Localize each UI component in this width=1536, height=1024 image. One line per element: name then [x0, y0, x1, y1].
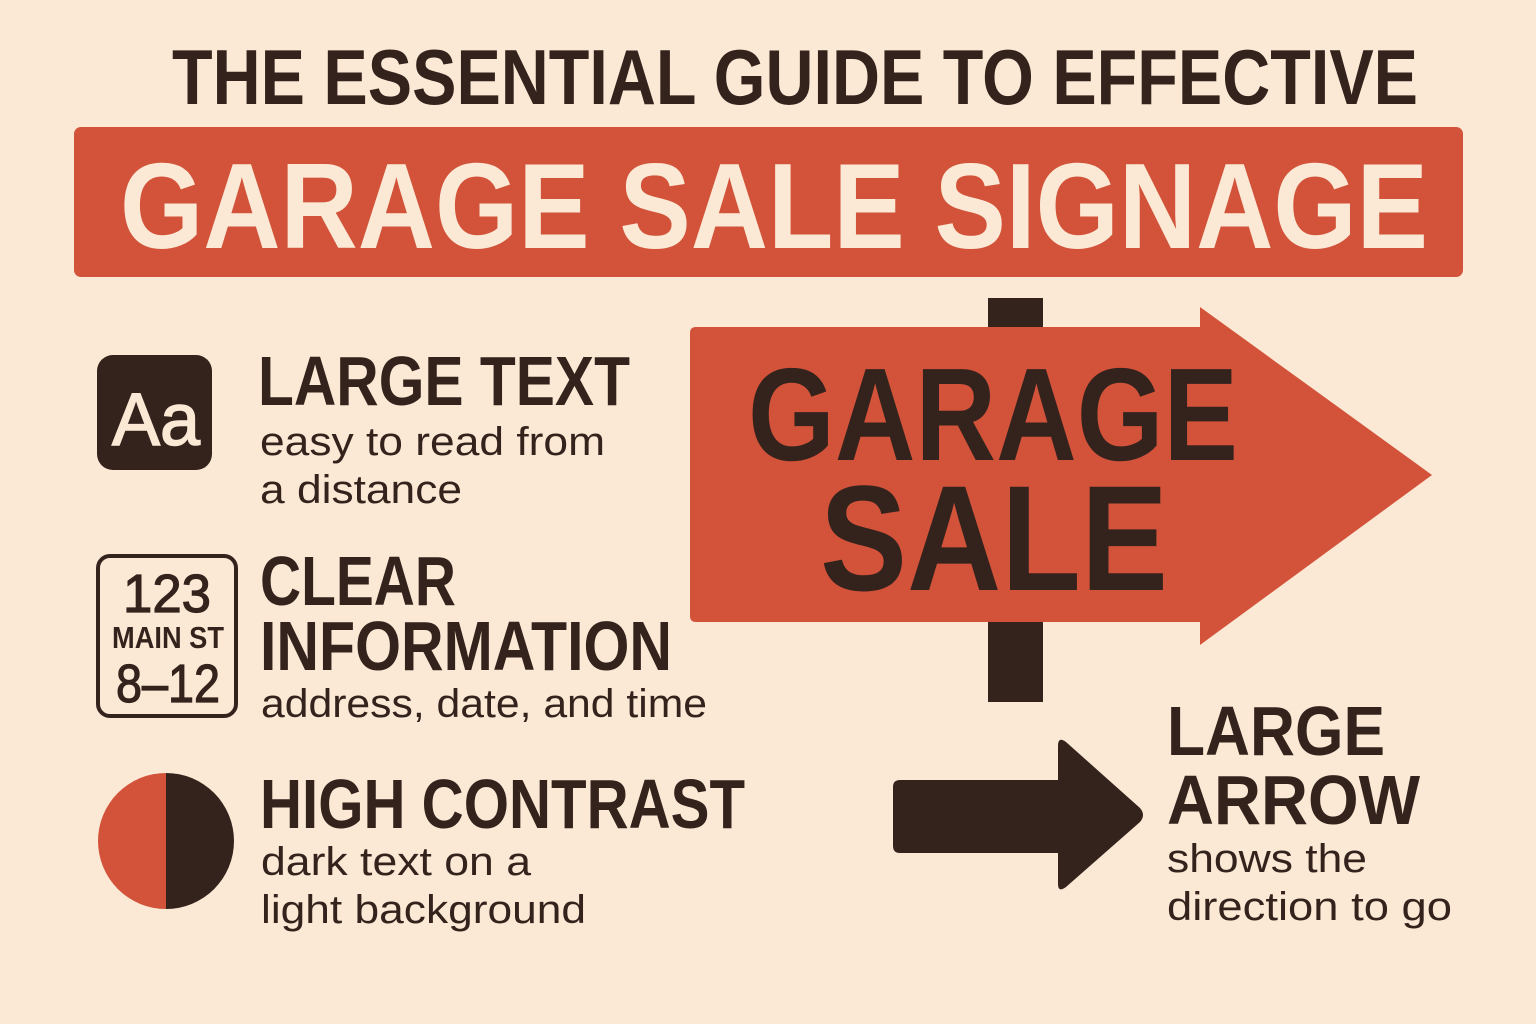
item: large text	[97, 342, 630, 512]
icon: address sign: 8–12	[116, 654, 220, 714]
icon: half circle	[98, 773, 234, 909]
item: large arrow text: shows the	[1167, 837, 1367, 881]
icon: Aa: Aa	[112, 378, 201, 461]
sign: garage sale arrow on post: GARAGE	[748, 341, 1238, 488]
item: large text: LARGE TEXT	[258, 342, 630, 420]
item: large arrow text	[1167, 692, 1452, 929]
sign: garage sale arrow on post	[690, 298, 1432, 702]
item: clear information	[98, 542, 707, 726]
item: large arrow text: LARGE	[1167, 692, 1385, 770]
icon: address sign: MAIN ST	[112, 620, 224, 655]
item: clear information: CLEAR	[260, 542, 456, 620]
item: large text: easy to read from	[260, 420, 605, 464]
item: high contrast	[98, 765, 745, 932]
icon: large arrow	[893, 740, 1143, 889]
item: high contrast: HIGH CONTRAST	[260, 765, 745, 843]
icon: address sign	[98, 556, 236, 716]
item: clear information: address, date, and time	[261, 682, 707, 726]
item: large arrow text: direction to go	[1167, 885, 1452, 929]
item: high contrast: light background	[261, 888, 586, 932]
sign: garage sale arrow on post: SALE	[820, 454, 1168, 622]
icon: address sign: 123	[123, 564, 211, 624]
icon: Aa	[97, 355, 212, 470]
item: large arrow text: ARROW	[1167, 761, 1420, 839]
item: large text: a distance	[260, 468, 462, 512]
item: high contrast: dark text on a	[261, 840, 532, 884]
item: clear information: INFORMATION	[260, 607, 672, 685]
